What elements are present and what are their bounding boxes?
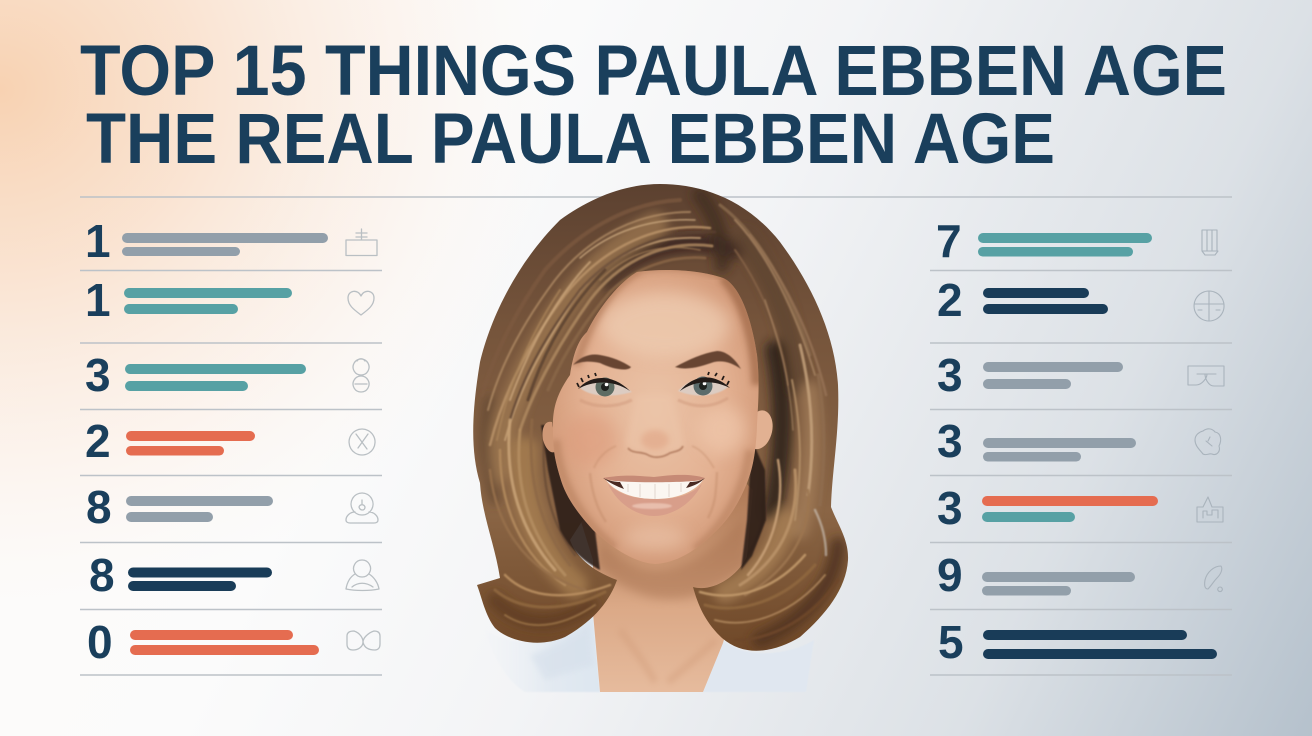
row 4 left — [85, 415, 375, 467]
row 1 left: 1 — [85, 215, 111, 267]
icon: circle cross — [349, 429, 375, 455]
left ear — [542, 422, 557, 452]
hair tonal zones — [485, 195, 838, 640]
row 2 left — [85, 274, 374, 326]
row 2 left: 1 — [85, 274, 111, 326]
row 2 right — [937, 274, 1224, 326]
panel: right list — [930, 215, 1232, 675]
eyebrows — [573, 351, 741, 370]
icon: figure — [353, 359, 369, 392]
row 7 left — [87, 616, 380, 668]
hair strands — [482, 195, 838, 640]
nose — [626, 395, 684, 457]
row 1 right: 7 — [936, 215, 962, 267]
row 3 right — [937, 349, 1224, 401]
left eye — [577, 373, 632, 396]
hair mass — [473, 184, 848, 651]
mouth — [603, 475, 705, 516]
dark hair beside jaw — [541, 425, 766, 570]
face shading — [556, 268, 757, 550]
row 3 left — [85, 349, 369, 401]
row 1 right — [936, 215, 1218, 267]
row 5 left: 8 — [86, 481, 112, 533]
face — [553, 270, 759, 564]
clothing — [484, 613, 814, 692]
row 3 right: 3 — [937, 349, 963, 401]
row 7 right: 5 — [938, 616, 964, 668]
portrait — [473, 184, 848, 692]
row 2 right: 2 — [937, 274, 963, 326]
title: THE REAL PAULA EBBEN AGE — [86, 100, 1055, 179]
icon: frame — [1197, 497, 1223, 522]
row 4 right — [937, 415, 1221, 467]
icon: blob — [1195, 429, 1221, 455]
icon: column — [1202, 230, 1218, 255]
row 6 right: 9 — [937, 549, 963, 601]
icon: person — [346, 560, 379, 590]
title: TOP 15 THINGS PAULA EBBEN AGE — [80, 32, 1227, 111]
row 4 right: 3 — [937, 415, 963, 467]
icon: leaf — [1205, 566, 1222, 592]
row 5 left — [86, 481, 378, 533]
icon: heart — [348, 291, 374, 315]
icon: glasses — [1188, 366, 1224, 386]
neck — [565, 470, 757, 692]
fine strands — [482, 200, 838, 640]
row 6 left: 8 — [89, 549, 115, 601]
row 5 right: 3 — [937, 482, 963, 534]
row 7 right — [938, 616, 1217, 668]
row 7 left: 0 — [87, 616, 113, 668]
row 3 left: 3 — [85, 349, 111, 401]
right ear — [752, 410, 773, 449]
row 1 left — [85, 215, 377, 267]
neck shadow — [597, 515, 747, 599]
icon: person portrait — [346, 493, 378, 523]
panel: left list — [80, 215, 382, 675]
row 6 left — [89, 549, 379, 601]
row 6 right — [937, 549, 1222, 601]
icon: twin loops — [347, 631, 380, 650]
title — [80, 32, 1227, 179]
icon: dial — [1194, 291, 1224, 321]
row 4 left: 2 — [85, 415, 111, 467]
icon: box with cross — [346, 229, 377, 256]
right eye — [678, 372, 730, 396]
row 5 right — [937, 482, 1223, 534]
